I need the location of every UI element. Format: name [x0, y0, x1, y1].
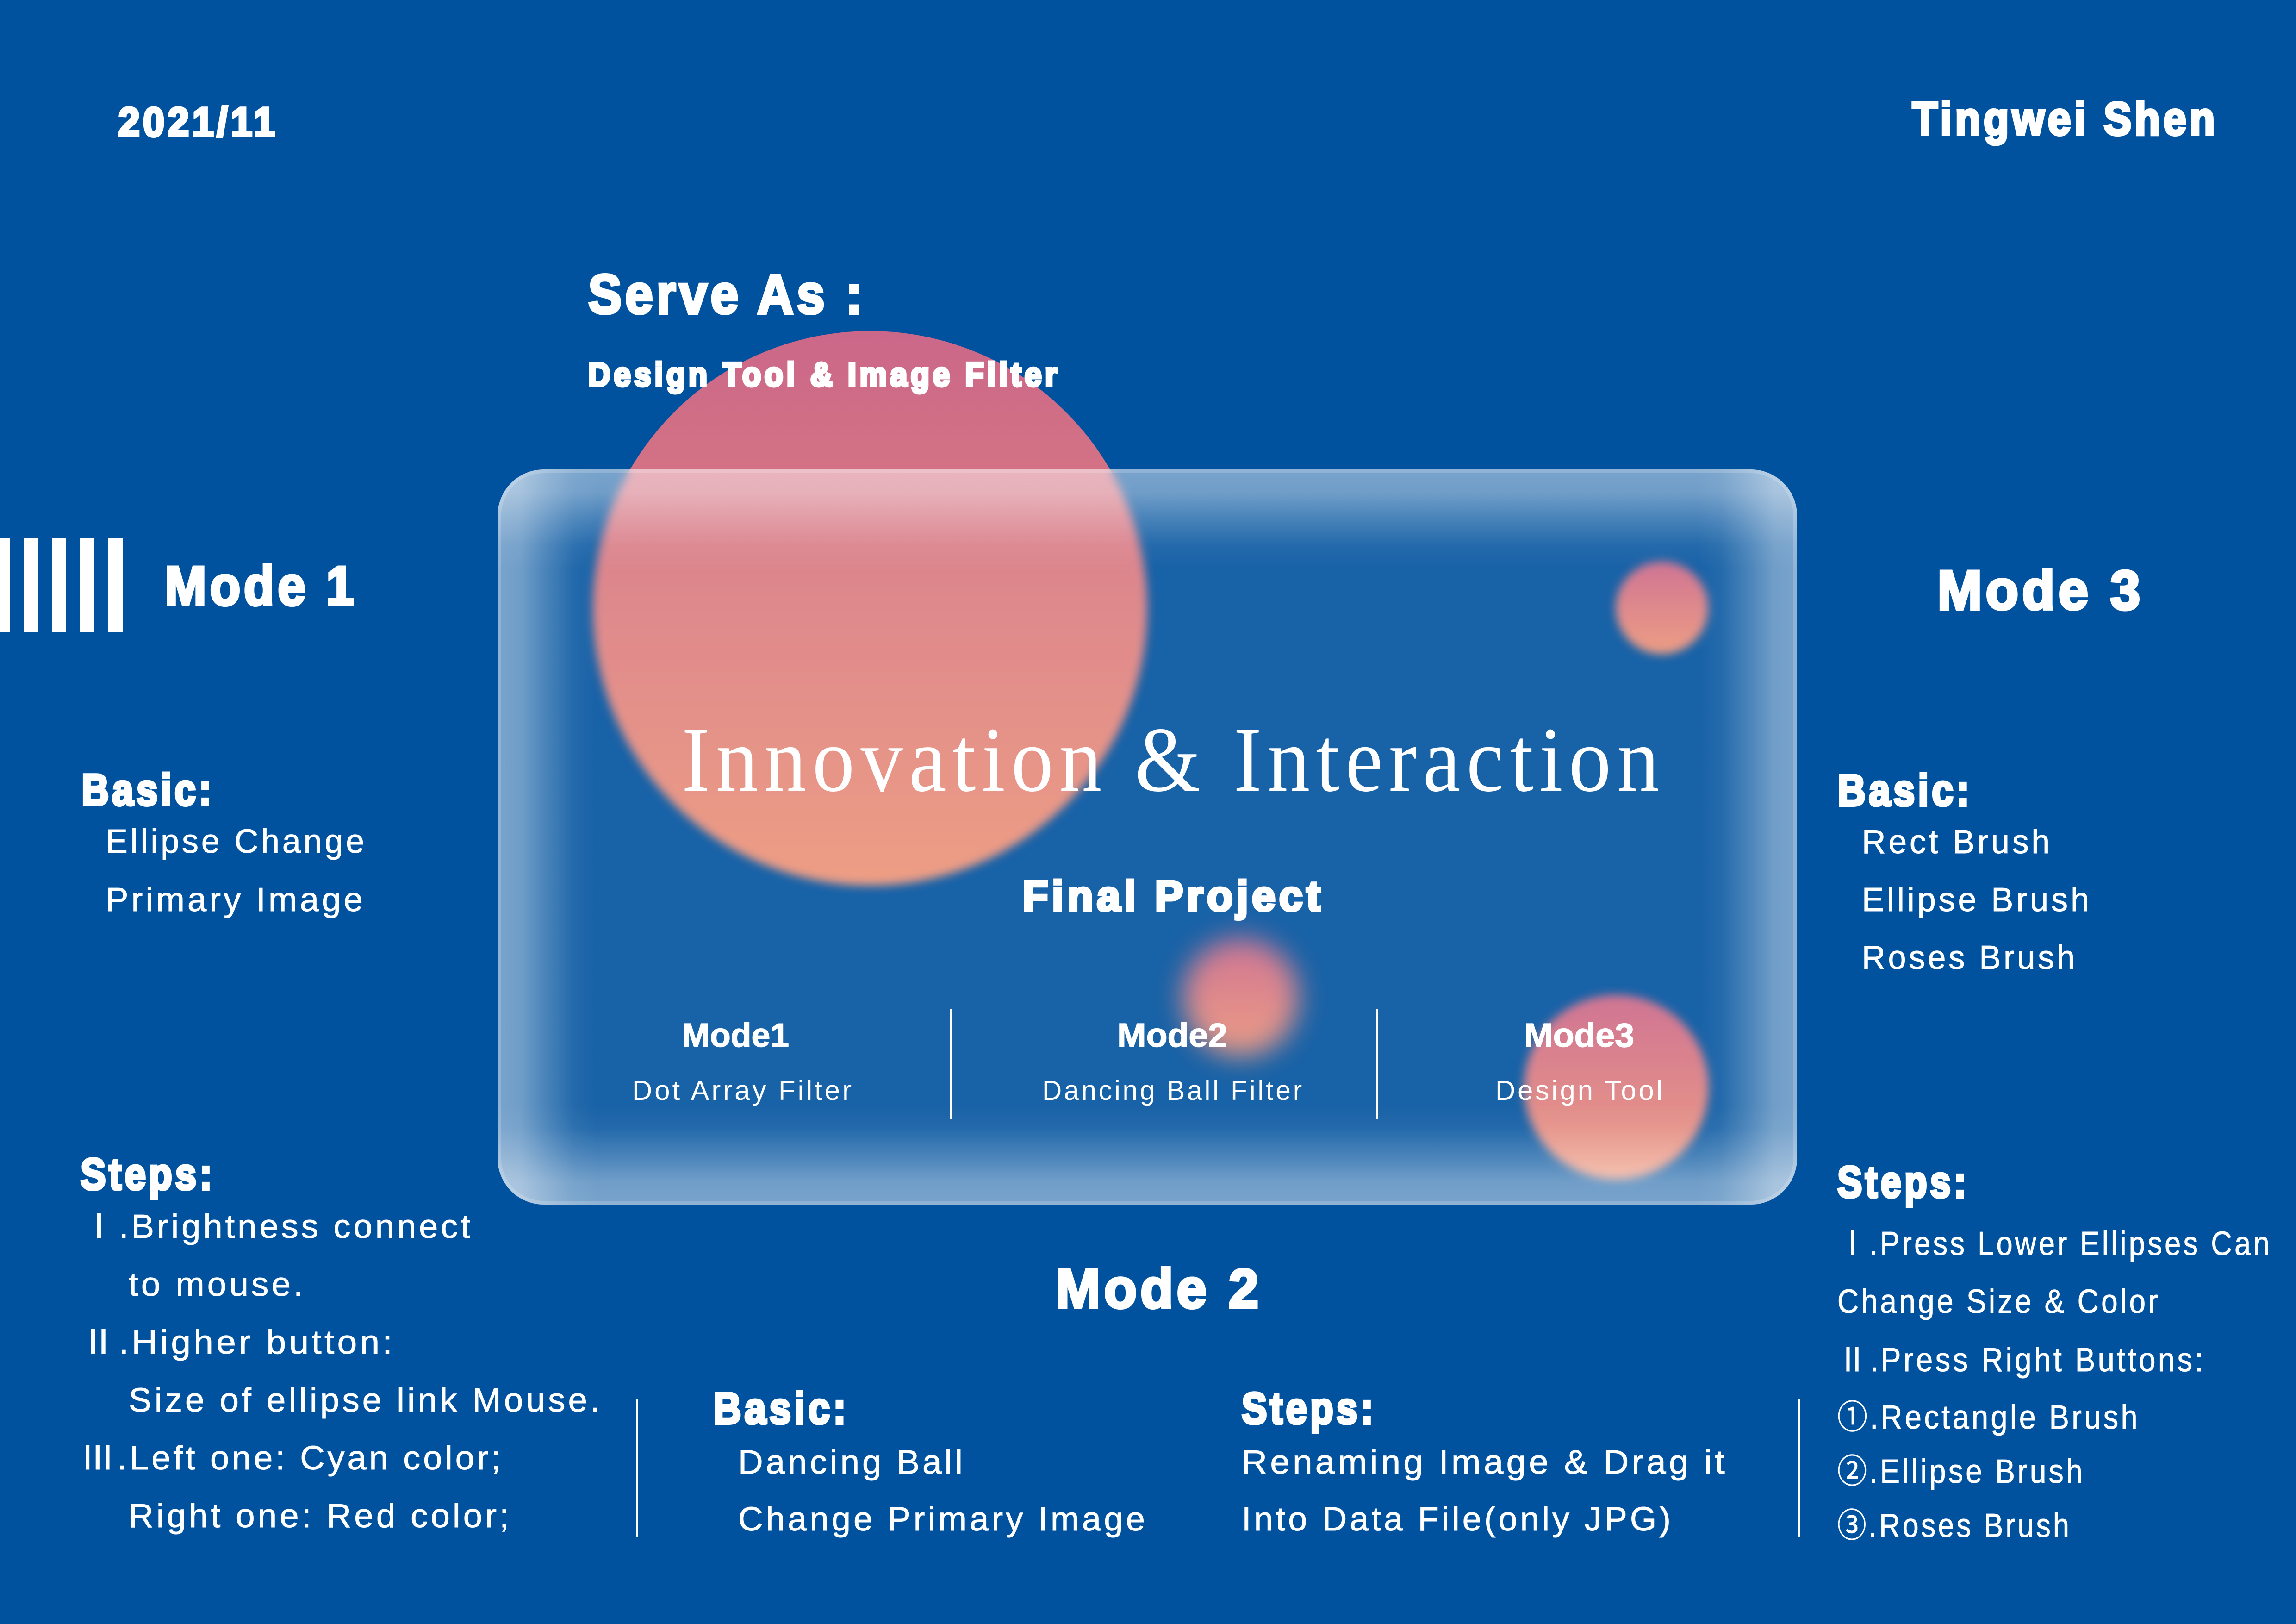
mode 1 steps text block: Steps: [81, 1149, 215, 1199]
author name: Tingwei Shen [1912, 93, 2218, 145]
mode 3 steps text block: Ⅱ.Press Right Buttons: [1837, 1342, 2206, 1379]
date: 2021/11 [118, 99, 278, 145]
card column: mode 2: Mode2 [1117, 1017, 1227, 1054]
mode 2 steps text block: Into Data File(only JPG) [1242, 1501, 1674, 1538]
mode 3 steps text block: Steps: [1837, 1157, 1969, 1207]
card column: mode 1: Dot Array Filter [632, 1075, 854, 1106]
mode 3 basic text block: Rect Brush [1862, 824, 2053, 861]
panel: frosted glass card [498, 469, 1797, 1205]
mode 2 basic text block: Dancing Ball [738, 1444, 965, 1481]
mode 1 steps text block [81, 1149, 603, 1535]
card column: mode 2 [1042, 1017, 1304, 1106]
divider: left of mode 2 [636, 1399, 638, 1537]
heading: serve as: Serve As : [588, 263, 865, 325]
mode 1 steps text block: Right one: Red color; [129, 1498, 512, 1535]
card column: mode 3: Mode3 [1524, 1017, 1634, 1054]
card column: mode 1 [632, 1017, 854, 1106]
circle: small top right [1616, 562, 1708, 654]
card column: mode 3 [1495, 1017, 1665, 1106]
mode 2 steps text block: Renaming Image & Drag it [1242, 1444, 1728, 1481]
mode 3 basic text block: Roses Brush [1862, 939, 2078, 976]
mode 2 basic text block: Basic: [713, 1384, 849, 1433]
heading: mode 3: Mode 3 [1937, 559, 2144, 621]
mode 3 basic text block [1838, 766, 2092, 976]
subtitle: final project: Final Project [1022, 873, 1324, 920]
circle: blurred behind Mode2 [1183, 938, 1299, 1056]
divider: left of mode 3 steps [1798, 1399, 1800, 1537]
mode 3 steps text block: ③.Roses Brush [1837, 1507, 2072, 1544]
mode 1 steps text block: Size of ellipse link Mouse. [129, 1382, 603, 1419]
heading: mode 2: Mode 2 [1056, 1258, 1262, 1320]
divider one [950, 1009, 952, 1119]
circle: large pink-orange gradient [593, 331, 1147, 886]
mode 2 steps text block: Steps: [1242, 1384, 1376, 1433]
mode 1 steps text block: Ⅲ.Left one: Cyan color; [81, 1440, 504, 1477]
card column: mode 3: Design Tool [1495, 1075, 1665, 1106]
mode 3 steps text block: Change Size & Color [1837, 1283, 2160, 1320]
mode 3 basic text block: Basic: [1838, 766, 1972, 815]
divider two [1376, 1009, 1378, 1119]
mode 2 basic text block: Change Primary Image [738, 1501, 1148, 1538]
mode 1 steps text block: to mouse. [129, 1266, 306, 1303]
mode 1 basic text block: Ellipse Change [106, 823, 367, 860]
mode 1 basic text block [81, 765, 367, 918]
heading: serve as [588, 263, 1060, 394]
heading: serve as: Design Tool & Image Filter [588, 356, 1060, 394]
circle: lower right behind Mode3 [1524, 995, 1709, 1180]
title: Innovation & Interaction [682, 709, 1665, 811]
card column: mode 2: Dancing Ball Filter [1042, 1075, 1304, 1106]
mode 3 steps text block: ①.Rectangle Brush [1837, 1399, 2140, 1436]
mode 2 basic text block [713, 1384, 1148, 1538]
mode 3 basic text block: Ellipse Brush [1862, 881, 2092, 918]
mode 2 steps text block [1242, 1384, 1728, 1538]
card column: mode 1: Mode1 [682, 1017, 789, 1054]
mode 1 steps text block: Ⅰ.Brightness connect [82, 1208, 473, 1245]
mode 1 basic text block: Basic: [81, 765, 215, 815]
heading: mode 1: Mode 1 [165, 555, 357, 617]
mode 3 steps text block: ②.Ellipse Brush [1837, 1453, 2085, 1490]
mode 1 basic text block: Primary Image [106, 881, 366, 918]
mode 3 steps text block [1837, 1157, 2272, 1544]
mode 1 steps text block: Ⅱ.Higher button: [81, 1324, 395, 1361]
icon: white vertical bars [0, 538, 123, 632]
